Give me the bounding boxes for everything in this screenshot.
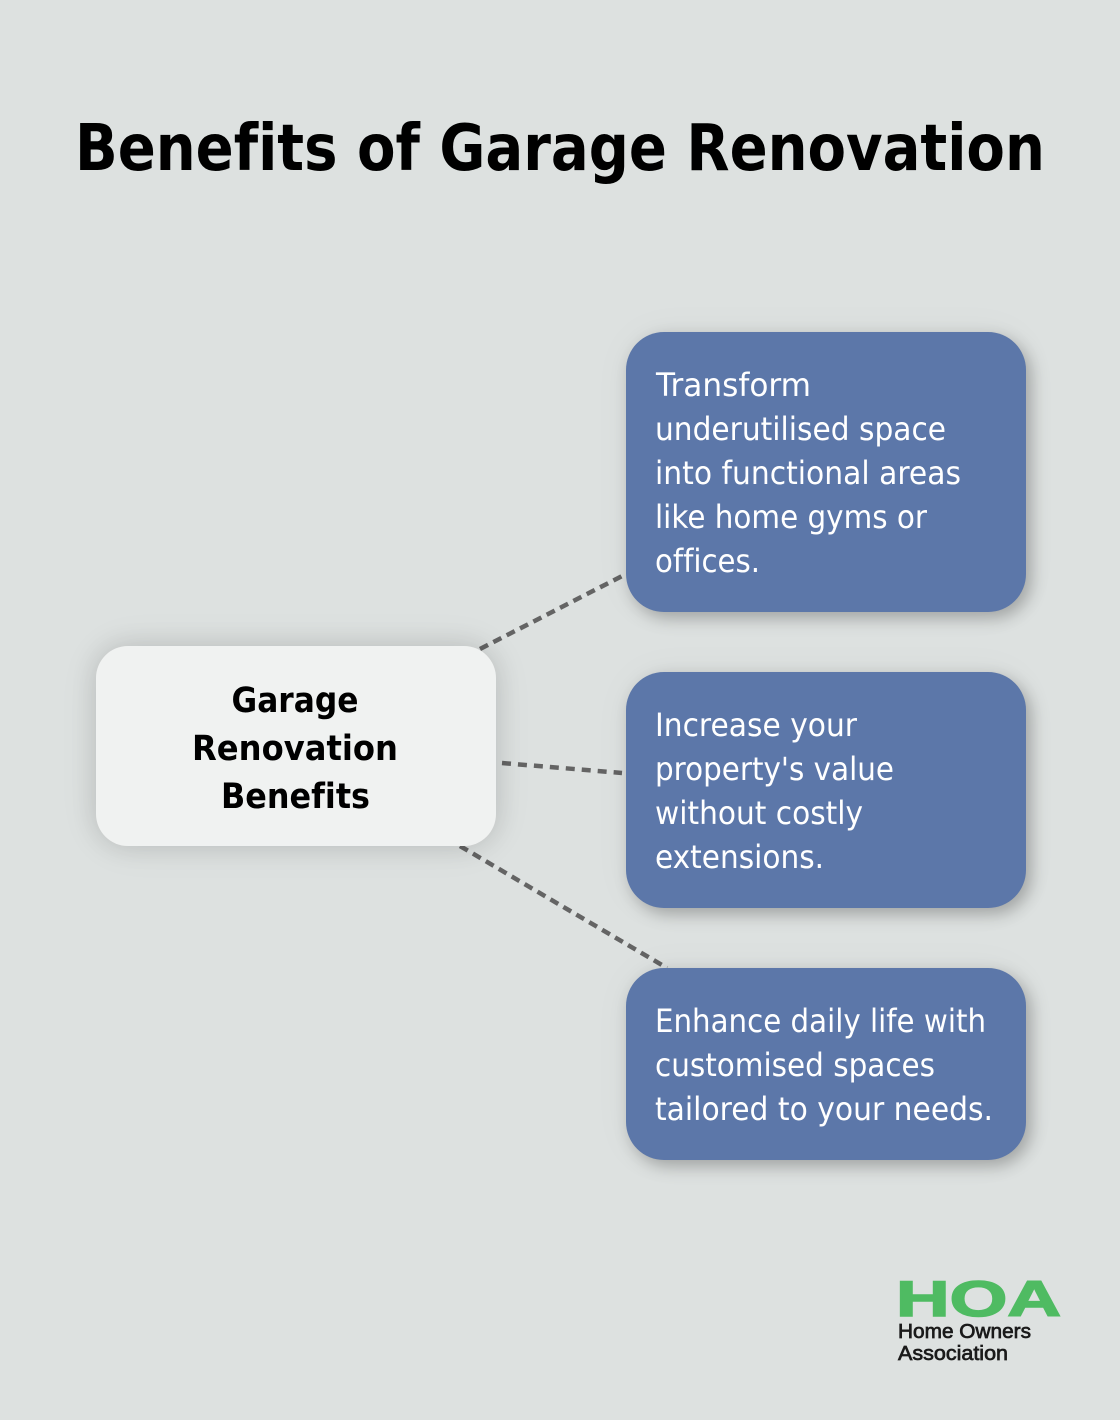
panel: transform space: offices. xyxy=(655,542,760,580)
panel: transform space: into functional areas xyxy=(655,454,961,492)
title: Benefits of Garage Renovation xyxy=(75,112,1045,186)
panel: property value xyxy=(626,672,1026,908)
panel: property value: extensions. xyxy=(655,838,824,876)
logo: Home Owners Association: Home Owners xyxy=(898,1321,1031,1343)
panel: property value: Increase your xyxy=(655,706,858,744)
panel: property value: without costly xyxy=(655,794,863,832)
panel: daily life: customised spaces xyxy=(655,1046,935,1084)
panel: daily life: Enhance daily life with xyxy=(655,1002,986,1040)
logo: Home Owners Association xyxy=(896,1271,1061,1365)
logo: Home Owners Association: HOA xyxy=(896,1271,1061,1327)
panel: daily life: tailored to your needs. xyxy=(655,1090,993,1128)
panel: transform space xyxy=(626,332,1026,612)
panel: transform space: Transform xyxy=(655,366,811,404)
panel: daily life xyxy=(626,968,1026,1160)
logo: Home Owners Association: Association xyxy=(898,1343,1008,1365)
panel: transform space: underutilised space xyxy=(655,410,946,448)
panel: central topic: Renovation xyxy=(192,729,398,769)
panel: property value: property's value xyxy=(655,750,894,788)
panel: transform space: like home gyms or xyxy=(655,498,928,536)
panel: central topic: Benefits xyxy=(221,777,370,817)
panel: central topic: Garage xyxy=(232,681,358,721)
panel: central topic xyxy=(96,646,496,846)
